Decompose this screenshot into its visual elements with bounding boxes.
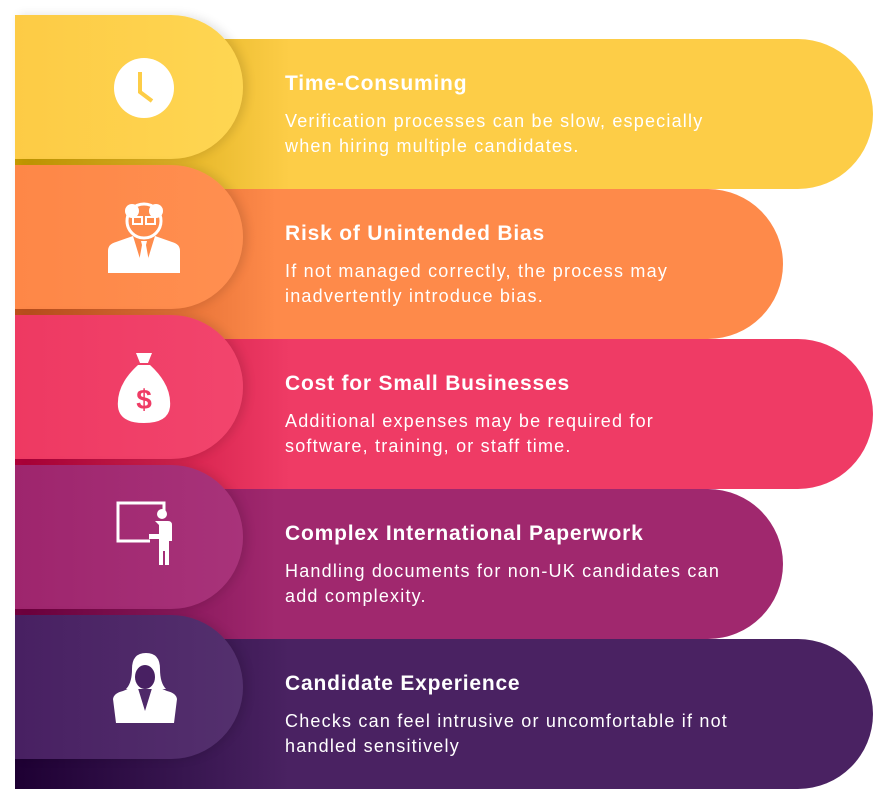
text 5: Candidate Experience [285,672,520,695]
tab 2 [15,165,243,309]
text 5 [285,672,728,756]
text 1: Time-Consuming [285,72,467,95]
icon: money bag [118,353,170,423]
bar 5 [15,639,873,789]
text 5: Checks can feel intrusive or uncomfortable if not [285,711,728,731]
text 5: handled sensitively [285,736,460,756]
bar 2 [15,189,783,339]
tab 4 [15,465,243,609]
text 4: Complex International Paperwork [285,522,644,545]
tab 3 [15,315,243,459]
text 2: Risk of Unintended Bias [285,222,545,245]
text 1: Verification processes can be slow, especially [285,111,703,131]
icon: presenter [116,502,172,565]
bar 3 [15,339,873,489]
text 4 [285,522,720,606]
text 3: software, training, or staff time. [285,436,572,456]
tab 5 [15,615,243,759]
text 2 [285,222,668,306]
icon: old man [108,202,180,273]
text 4: add complexity. [285,586,427,606]
text 1: when hiring multiple candidates. [285,136,580,156]
text 2: inadvertently introduce bias. [285,286,544,306]
text 2: If not managed correctly, the process may [285,261,668,281]
icon: money bag: $ [136,384,152,415]
bar 1 [15,39,873,189]
text 3 [285,372,654,456]
text 1 [285,72,703,156]
icon: clock [114,58,174,118]
icon: woman [113,653,177,723]
bar 4 [15,489,783,639]
tab 1 [15,15,243,159]
text 3: Cost for Small Businesses [285,372,570,395]
text 4: Handling documents for non-UK candidates can [285,561,720,581]
text 3: Additional expenses may be required for [285,411,654,431]
